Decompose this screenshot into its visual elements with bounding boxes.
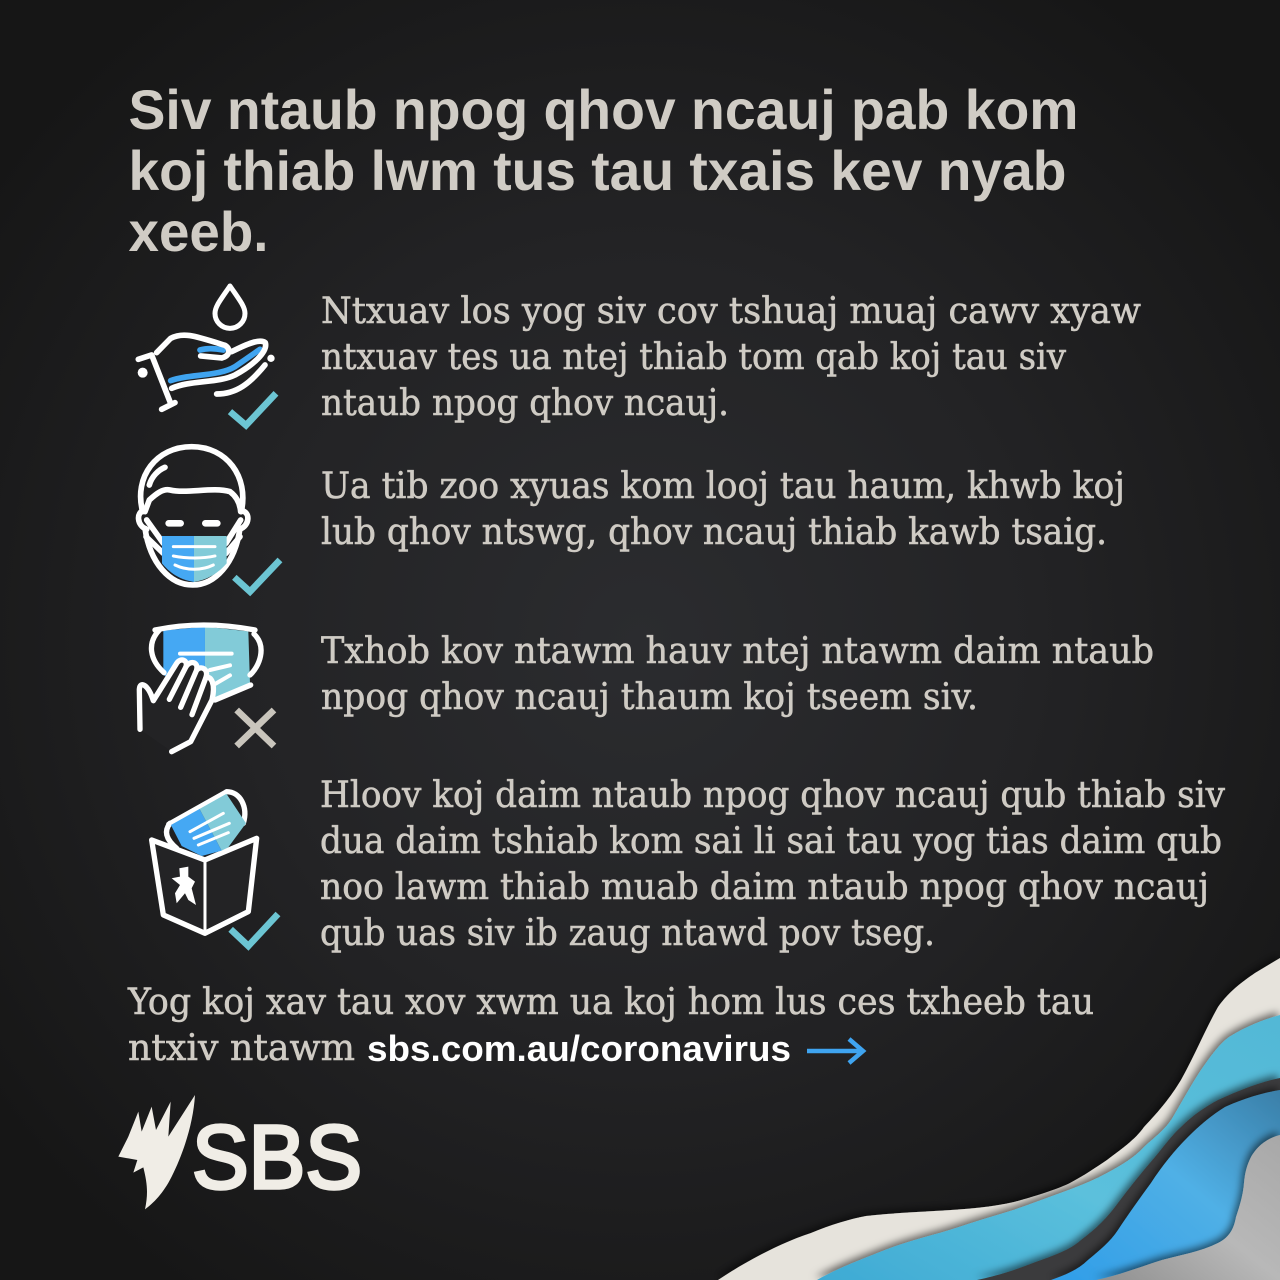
title: Siv ntaub npog qhov ncauj pab kom <box>128 78 1078 141</box>
text: replace the mask: Hloov koj daim ntaub npog qhov ncauj qub thiab siv <box>320 775 1226 816</box>
text: footer call to action <box>127 982 1094 1069</box>
text: wear a mask <box>321 466 1125 553</box>
text: do not touch the mask <box>321 631 1154 718</box>
text: replace the mask: dua daim tshiab kom sai li sai tau yog tias daim qub <box>320 821 1222 862</box>
icon: mask going into bin <box>152 792 278 946</box>
icon: teal tick <box>231 914 278 946</box>
decorative layered paper waves <box>700 958 1280 1280</box>
icon: face wearing mask <box>139 447 280 592</box>
icon: hand touching mask <box>139 625 274 752</box>
arrow <box>807 1039 863 1063</box>
icon: cross <box>237 710 274 746</box>
text: replace the mask <box>320 775 1226 954</box>
text: washing hands: Ntxuav los yog siv cov tshuaj muaj cawv xyaw <box>321 291 1141 332</box>
title: koj thiab lwm tus tau txais kev nyab <box>128 139 1066 202</box>
title: xeeb. <box>128 200 268 263</box>
text: wear a mask: lub qhov ntswg, qhov ncauj thiab kawb tsaig. <box>321 512 1107 553</box>
icon: teal tick <box>234 560 280 592</box>
text: do not touch the mask: npog qhov ncauj thaum koj tseem siv. <box>321 677 978 718</box>
text: washing hands <box>321 291 1141 424</box>
text: replace the mask: noo lawm thiab muab daim ntaub npog qhov ncauj <box>320 867 1209 908</box>
link: sbs.com.au/coronavirus <box>367 1028 791 1069</box>
text: footer call to action: ntxiv ntawm <box>128 1028 355 1069</box>
text: wear a mask: Ua tib zoo xyuas kom looj tau haum, khwb koj <box>321 466 1125 507</box>
icon: hand washing with water drop <box>138 286 276 425</box>
text: washing hands: ntxuav tes ua ntej thiab tom qab koj tau siv <box>321 337 1067 378</box>
text: do not touch the mask: Txhob kov ntawm hauv ntej ntawm daim ntaub <box>321 631 1154 672</box>
icon: teal tick <box>230 393 276 425</box>
logo: SBS <box>118 1095 362 1209</box>
title <box>128 78 1078 263</box>
text: washing hands: ntaub npog qhov ncauj. <box>321 383 729 424</box>
logo: SBS: SBS <box>192 1108 362 1208</box>
text: footer call to action: Yog koj xav tau xov xwm ua koj hom lus ces txheeb tau <box>127 982 1094 1023</box>
text: replace the mask: qub uas siv ib zaug ntawd pov tseg. <box>320 913 935 954</box>
